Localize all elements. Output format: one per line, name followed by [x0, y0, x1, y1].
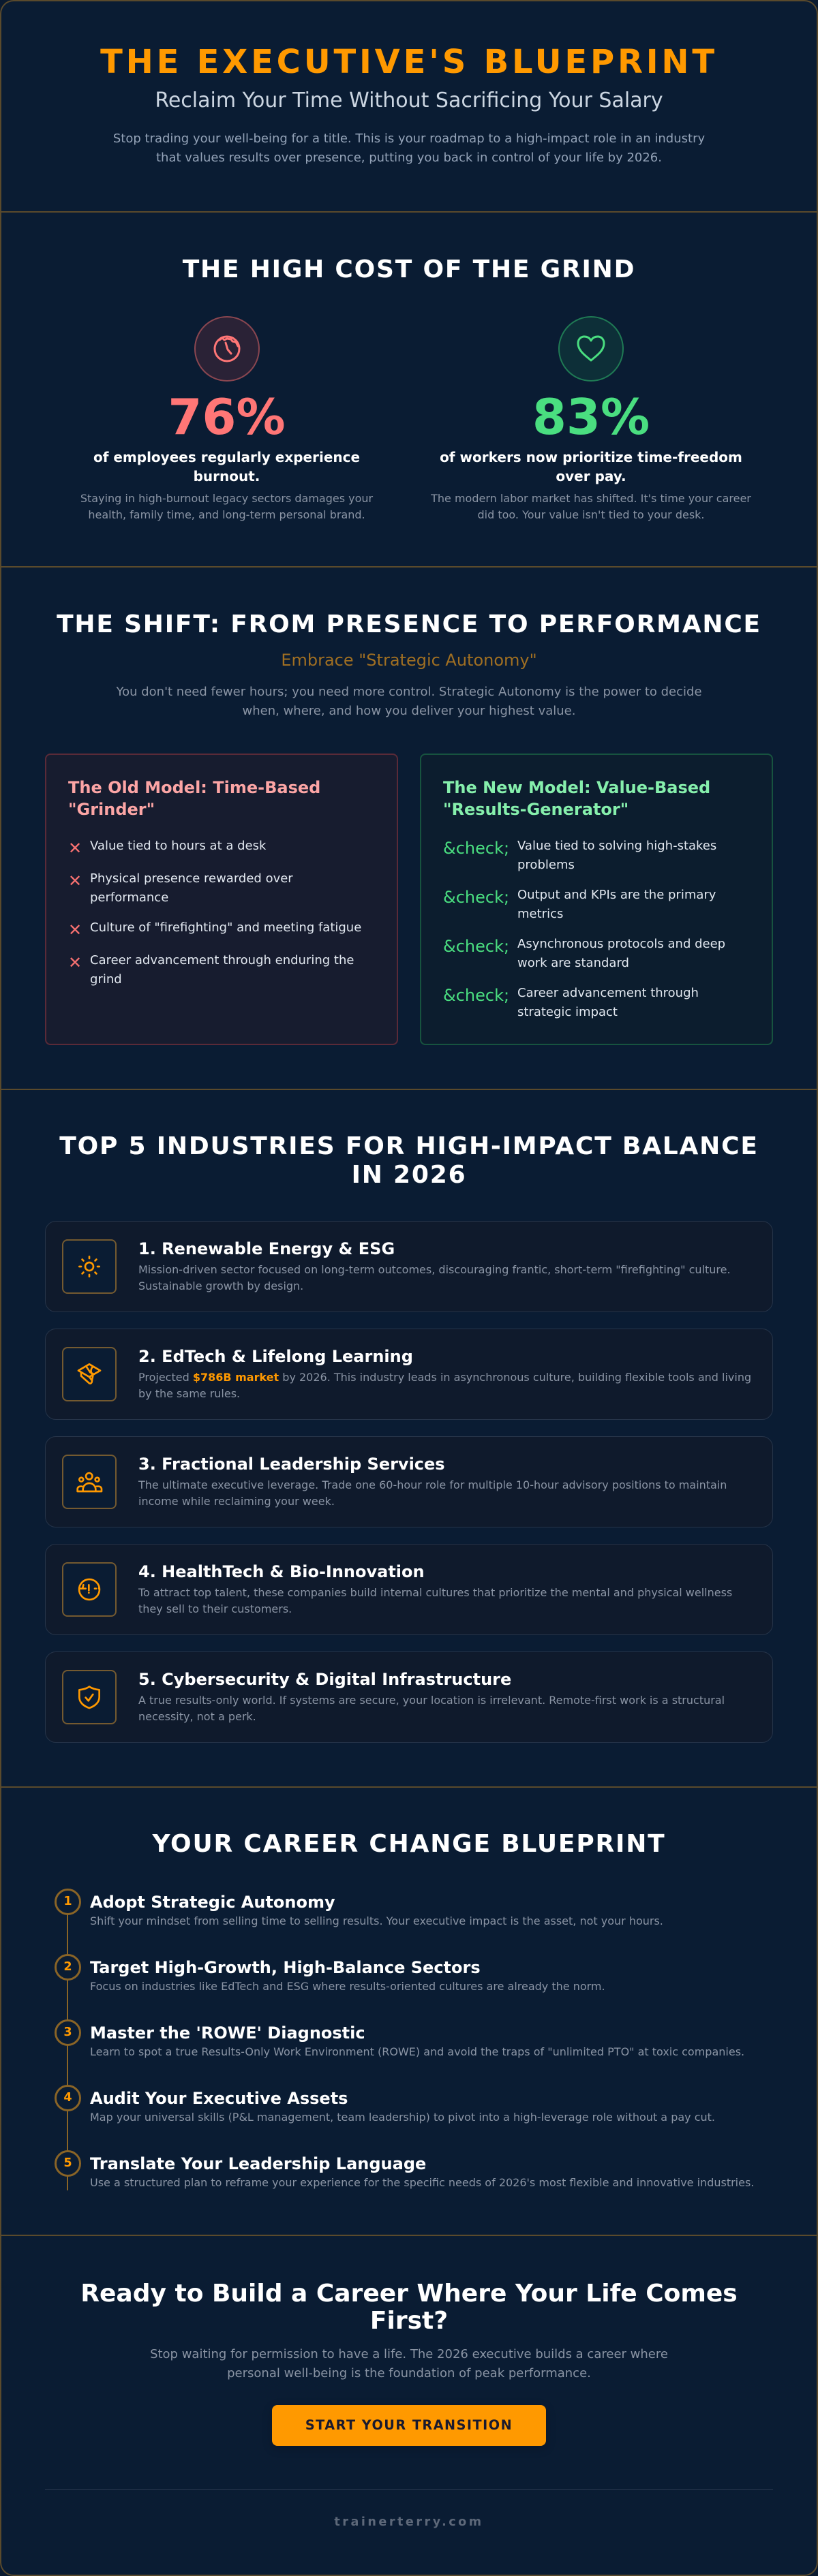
new model heading: The New Model: Value-Based [443, 778, 710, 797]
step 3 number: 3 [63, 2026, 72, 2039]
step 4 number [55, 2085, 81, 2111]
button: start your transition [272, 2405, 546, 2446]
subtitle: Reclaim Your Time Without Sacrificing Your Salary [155, 89, 663, 112]
step 1 number [55, 1889, 81, 1915]
heading: top 5 industries [59, 1132, 759, 1189]
intro text: Stop trading your well-being for a title. This is your roadmap to a high-impact role in an industry [113, 131, 705, 146]
new model heading: "Results-Generator" [443, 800, 628, 819]
card text: Mission-driven sector focused on long-term outcomes, discouraging frantic, short-term "firefighting" culture. [138, 1263, 731, 1276]
old model list: ✕ [68, 839, 82, 858]
step 3 title: Master the 'ROWE' Diagnostic [90, 2023, 365, 2043]
old model list: ✕ [68, 953, 82, 972]
timeline: five steps [55, 1889, 754, 2190]
stat label [93, 449, 360, 484]
old model list: ✕ [68, 920, 82, 940]
icon: health gauge [62, 1562, 117, 1617]
old model heading: The Old Model: Time-Based [68, 778, 320, 797]
new model list: Career advancement through [517, 986, 699, 1000]
industry card 4 [45, 1544, 773, 1635]
stat description: did too. Your value isn't tied to your desk. [477, 508, 705, 521]
icon: broken clock [194, 316, 260, 382]
step 5 text: Use a structured plan to reframe your experience for the specific needs of 2026's most flexible and innovative industries. [90, 2176, 754, 2189]
card text [138, 1263, 731, 1292]
card title: 4. HealthTech & Bio-Innovation [138, 1562, 425, 1581]
stat description: The modern labor market has shifted. It's time your career [431, 492, 751, 505]
new model list: &check; [443, 839, 509, 858]
intro text: that values results over presence, putting you back in control of your life by 2026. [156, 151, 662, 165]
step 2 title: Target High-Growth, High-Balance Sectors [90, 1958, 481, 1977]
panel: old model [45, 754, 398, 1045]
old model list: Physical presence rewarded over [90, 871, 293, 886]
panel: burnout stat [80, 316, 374, 521]
stat value: 83%: 83% [532, 388, 650, 446]
industry card 2 [45, 1329, 773, 1420]
industry card 3 [45, 1436, 773, 1527]
stat description [80, 492, 374, 521]
old model heading: "Grinder" [68, 800, 155, 819]
card text: Projected $786B market by 2026. This industry leads in asynchronous culture, building flexible tools and living [138, 1371, 751, 1384]
heading: top 5 industries: IN 2026 [352, 1161, 466, 1189]
timeline line [67, 1901, 68, 2190]
step 2 number: 2 [63, 1960, 72, 1974]
card text: A true results-only world. If systems are secure, your location is irrelevant. Remote-first work is a structural [138, 1694, 725, 1707]
button: start your transition: START YOUR TRANSITION [305, 2417, 513, 2433]
icon: shield check [62, 1670, 117, 1724]
stat label: of employees regularly experience [93, 449, 360, 465]
old model heading [68, 778, 320, 819]
new model list: work are standard [517, 956, 629, 970]
icon: sun [62, 1239, 117, 1294]
new model list: Output and KPIs are the primary [517, 888, 716, 902]
card title: 5. Cybersecurity & Digital Infrastructure [138, 1670, 511, 1689]
new model list: problems [517, 858, 575, 872]
new model list [443, 839, 725, 1019]
step 2 number [55, 1954, 81, 1981]
panel: new model [420, 754, 773, 1045]
panel: time-freedom stat [431, 316, 751, 521]
card title: 3. Fractional Leadership Services [138, 1455, 445, 1474]
step 3 number [55, 2019, 81, 2046]
new model list: Asynchronous protocols and deep [517, 937, 725, 951]
footer: website: trainerterry.com [334, 2515, 484, 2529]
card text: they sell to their customers. [138, 1602, 292, 1615]
explanation text: when, where, and how you deliver your highest value. [243, 704, 575, 718]
old model list: Career advancement through enduring the [90, 953, 354, 967]
icon: team [62, 1455, 117, 1509]
step 5 number: 5 [63, 2156, 72, 2170]
intro text [113, 131, 705, 165]
call to action text [150, 2347, 668, 2380]
stat description [431, 492, 751, 521]
step 5 number [55, 2150, 81, 2177]
new model list: &check; [443, 937, 509, 956]
card text [138, 1694, 725, 1723]
new model list: &check; [443, 888, 509, 907]
industry card 1 [45, 1221, 773, 1312]
stat label: burnout. [194, 468, 260, 484]
stat label: of workers now prioritize time-freedom [440, 449, 742, 465]
new model heading [443, 778, 710, 819]
heading: career change blueprint: YOUR CAREER CHANGE BLUEPRINT [152, 1830, 666, 1858]
stat label [440, 449, 742, 484]
card text: Sustainable growth by design. [138, 1279, 303, 1292]
industry card 5 [45, 1651, 773, 1743]
step 4 title: Audit Your Executive Assets [90, 2089, 348, 2108]
heading: top 5 industries: TOP 5 INDUSTRIES FOR HIGH-IMPACT BALANCE [59, 1132, 759, 1160]
heading: the shift: THE SHIFT: FROM PRESENCE TO PERFORMANCE [57, 610, 761, 638]
stat value: 76%: 76% [168, 388, 286, 446]
call to action heading [80, 2280, 738, 2335]
icon: heart [558, 316, 624, 382]
step 4 number: 4 [63, 2091, 72, 2105]
card text [138, 1478, 727, 1508]
new model list: Value tied to solving high-stakes [517, 839, 716, 853]
call to action heading: Ready to Build a Career Where Your Life Comes [80, 2280, 738, 2308]
card text [138, 1371, 751, 1400]
old model list: Culture of "firefighting" and meeting fatigue [90, 920, 361, 935]
card text: necessity, not a perk. [138, 1710, 256, 1723]
step 5 title: Translate Your Leadership Language [90, 2154, 426, 2173]
subheading: strategic autonomy: Embrace "Strategic Autonomy" [281, 651, 537, 670]
old model list: ✕ [68, 871, 82, 890]
card text: income while reclaiming your week. [138, 1495, 335, 1508]
footer divider [45, 2489, 773, 2490]
card title: 2. EdTech & Lifelong Learning [138, 1347, 413, 1366]
title: THE EXECUTIVE'S BLUEPRINT [100, 43, 718, 81]
step 3 text: Learn to spot a true Results-Only Work Environment (ROWE) and avoid the traps of "unlimited PTO" at toxic companies. [90, 2045, 744, 2058]
card text: The ultimate executive leverage. Trade one 60-hour role for multiple 10-hour advisory positions to maintain [138, 1478, 727, 1491]
stat description: Staying in high-burnout legacy sectors damages your [80, 492, 373, 505]
step 4 text: Map your universal skills (P&L management, team leadership) to pivot into a high-leverage role without a pay cut. [90, 2111, 715, 2124]
card text [138, 1586, 732, 1615]
call to action text: personal well-being is the foundation of peak performance. [227, 2366, 591, 2380]
step 1 text: Shift your mindset from selling time to selling results. Your executive impact is the asset, not your hours. [90, 1914, 663, 1927]
old model list [68, 839, 361, 987]
new model list: strategic impact [517, 1005, 618, 1019]
explanation text [116, 685, 702, 718]
stat description: health, family time, and long-term personal brand. [88, 508, 365, 521]
card title: 1. Renewable Energy & ESG [138, 1239, 395, 1258]
step 2 text: Focus on industries like EdTech and ESG where results-oriented cultures are already the norm. [90, 1980, 605, 1993]
new model list: &check; [443, 986, 509, 1005]
card text: To attract top talent, these companies build internal cultures that prioritize the mental and physical wellness [138, 1586, 732, 1599]
old model list: performance [90, 890, 168, 905]
heading: the high cost of the grind: THE HIGH COST OF THE GRIND [183, 255, 635, 283]
old model list: Value tied to hours at a desk [90, 839, 266, 853]
call to action heading: First? [370, 2307, 448, 2335]
old model list: grind [90, 972, 122, 987]
call to action text: Stop waiting for permission to have a life. The 2026 executive builds a career where [150, 2347, 668, 2361]
card text: by the same rules. [138, 1387, 240, 1400]
icon: graduation cap [62, 1347, 117, 1401]
explanation text: You don't need fewer hours; you need more control. Strategic Autonomy is the power to decide [116, 685, 702, 699]
step 1 number: 1 [63, 1895, 72, 1908]
new model list: metrics [517, 907, 563, 921]
stat label: over pay. [556, 468, 626, 484]
step 1 title: Adopt Strategic Autonomy [90, 1893, 335, 1912]
